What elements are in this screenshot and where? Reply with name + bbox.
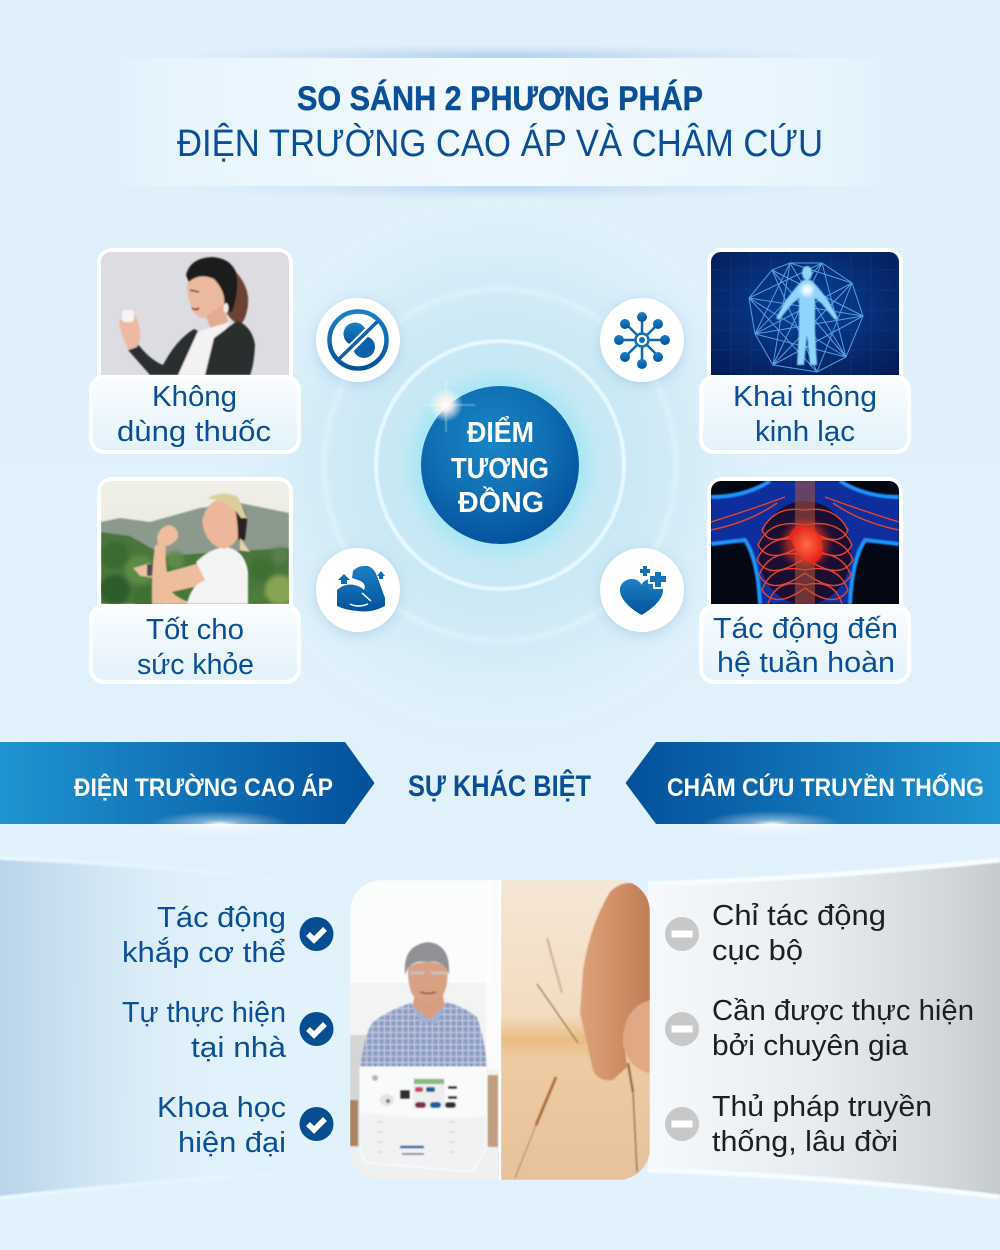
caption: tác động đến hệ tuần hoàn: hệ tuần hoàn [717,647,895,679]
card: khai thông kinh lạc [701,248,909,452]
title panel [110,44,890,201]
item: cần được thực hiện bởi chuyên gia: Cần được thực hiện [712,995,974,1027]
banner: điện trường cao áp [0,742,374,837]
photo: woman stretching outdoors [100,481,295,609]
photo: man with device [350,880,500,1180]
centre circle: điểm tương đồng [410,375,590,555]
item: tự thực hiện tại nhà: tại nhà [191,1032,287,1064]
caption: không dùng thuốc: Không [152,381,237,413]
centre circle: điểm tương đồng: ĐỒNG [458,485,544,519]
item: thủ pháp truyền thống, lâu đời [665,1091,932,1158]
item: khoa học hiện đại: hiện đại [178,1127,286,1159]
centre circle: điểm tương đồng: TƯƠNG [451,453,549,485]
title line 1: SO SÁNH 2 PHƯƠNG PHÁP [297,80,703,118]
icon: meridian network [600,298,684,382]
item: khoa học hiện đại: Khoa học [157,1092,286,1124]
item: chỉ tác động cục bộ [665,900,886,967]
item: chỉ tác động cục bộ: Chỉ tác động [712,900,886,932]
comparison photo [350,880,650,1180]
item: cần được thực hiện bởi chuyên gia [665,995,974,1062]
item: thủ pháp truyền thống, lâu đời: thống, lâu đời [712,1126,898,1158]
photo: glowing chest and heart [711,481,899,605]
item: tác động khắp cơ thể: Tác động [157,902,286,934]
list: acupuncture limitations [665,900,974,1158]
item: thủ pháp truyền thống, lâu đời: Thủ pháp truyền [712,1091,932,1123]
card: tác động đến hệ tuần hoàn [701,477,909,682]
banner: điện trường cao áp: ĐIỆN TRƯỜNG CAO ÁP [74,772,333,802]
caption: tác động đến hệ tuần hoàn [701,606,909,682]
caption: tác động đến hệ tuần hoàn: Tác động đến [713,613,898,645]
caption: không dùng thuốc [91,377,299,452]
photo: glowing body network [711,252,899,375]
item: chỉ tác động cục bộ: cục bộ [712,935,803,967]
title line 2: ĐIỆN TRƯỜNG CAO ÁP VÀ CHÂM CỨU [177,122,823,165]
icon: heart with plus [600,548,684,632]
heading: sự khác biệt: SỰ KHÁC BIỆT [408,769,591,803]
icon: muscle arm [316,548,400,632]
icon: no pills [316,298,400,382]
caption: khai thông kinh lạc: kinh lạc [755,416,855,448]
sparkle [425,380,475,432]
item: cần được thực hiện bởi chuyên gia: bởi chuyên gia [712,1030,909,1062]
panel: right limitations background [648,860,1000,1197]
banner: châm cứu truyền thống [626,742,1000,837]
caption: tốt cho sức khỏe: sức khỏe [137,649,254,681]
list: electric field benefits [122,902,334,1159]
item: tác động khắp cơ thể: khắp cơ thể [122,936,286,969]
photo: woman looking at pill bottle [101,252,289,375]
centre circle: điểm tương đồng: ĐIỂM [467,415,534,449]
caption: tốt cho sức khỏe [91,606,299,682]
photo: acupuncture needles [501,880,650,1180]
caption: không dùng thuốc: dùng thuốc [117,416,271,448]
item: tác động khắp cơ thể [122,902,334,969]
item: tự thực hiện tại nhà [122,997,334,1064]
item: khoa học hiện đại [157,1092,334,1159]
caption: tốt cho sức khỏe: Tốt cho [146,614,244,646]
caption: khai thông kinh lạc: Khai thông [733,381,877,413]
item: tự thực hiện tại nhà: Tự thực hiện [122,997,286,1029]
panel: left benefits background [0,858,352,1198]
caption: khai thông kinh lạc [701,377,909,452]
card: tốt cho sức khỏe [91,477,299,682]
card: không dùng thuốc [91,248,299,452]
